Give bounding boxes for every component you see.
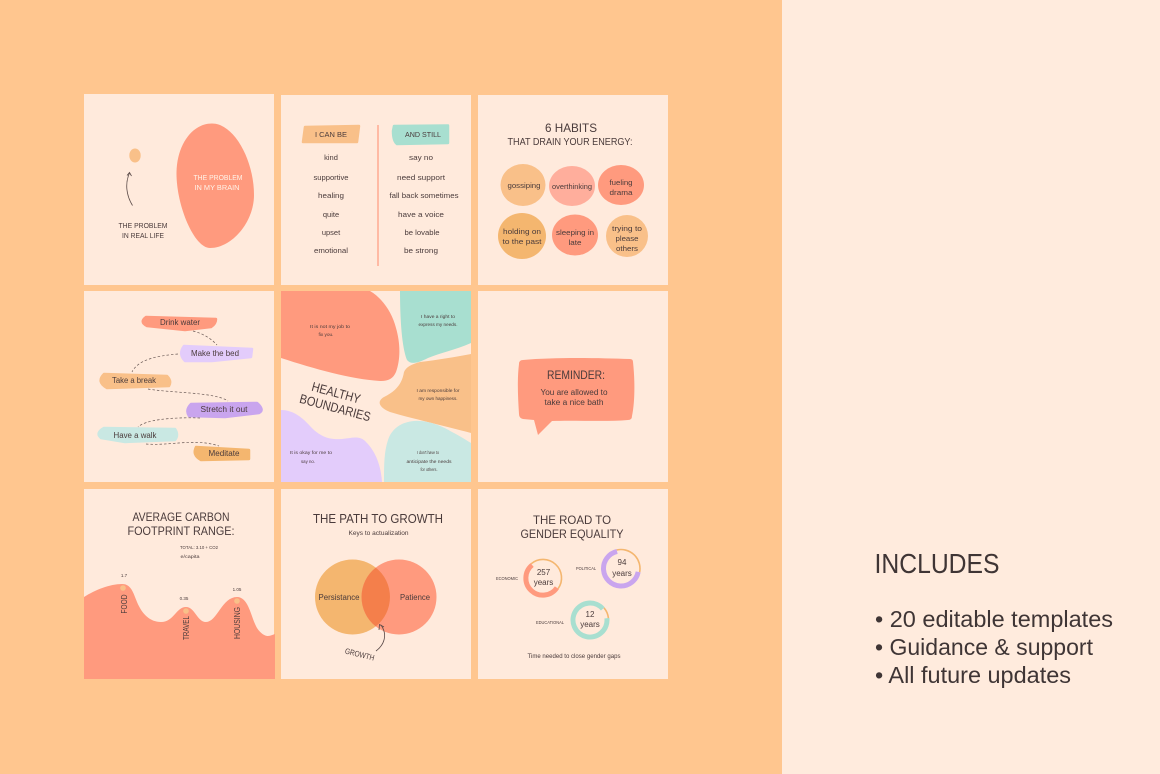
ring: political <box>576 550 640 586</box>
bubble: overthinking: overthinking <box>552 182 592 191</box>
bubble: sleeping in late: late <box>568 238 582 247</box>
blob: not my job <box>281 291 399 381</box>
text: reminder message: You are allowed to <box>540 388 608 397</box>
data labels and markers: TRAVEL <box>182 616 191 640</box>
bubble: trying to please others: please <box>616 234 638 243</box>
title: carbon footprint: AVERAGE CARBON <box>132 510 230 524</box>
list: included items <box>875 606 1113 688</box>
step: meditate: Meditate <box>208 449 240 458</box>
blob: responsible for happiness: my own happiness. <box>418 396 458 401</box>
blob: problem in my brain: THE PROBLEM <box>194 173 242 182</box>
title: path to growth: Keys to actualization <box>348 531 408 537</box>
blob: right to express: I have a right to <box>421 314 456 319</box>
list: i can be: emotional <box>314 246 348 255</box>
ring: educational: 12 <box>586 610 595 619</box>
list: and still: need support <box>397 173 446 182</box>
list: i can be <box>314 153 348 255</box>
blob: okay to say no <box>281 410 382 482</box>
blob: responsible for happiness: I am responsible for <box>416 388 460 393</box>
title: gender equality: GENDER EQUALITY <box>520 527 624 541</box>
blob: not my job: fix you. <box>318 332 334 337</box>
title: six habits <box>508 121 632 148</box>
list: and still: fall back sometimes <box>390 191 459 200</box>
bubble: sleeping in late <box>552 214 598 256</box>
title: healthy boundaries: HEALTHY <box>310 379 363 406</box>
step: stretch it out: Stretch it out <box>200 405 248 414</box>
panel: right sidebar <box>782 0 1160 774</box>
list: included items: • All future updates <box>875 662 1071 688</box>
blob: not my job: It is not my job to <box>310 324 351 329</box>
title: path to growth <box>313 511 443 537</box>
list: and still: be strong <box>404 246 438 255</box>
text: problem in real life: THE PROBLEM <box>118 221 168 230</box>
ring: educational: EDUCATIONAL <box>536 620 564 625</box>
list: and still: have a voice <box>398 210 444 219</box>
step: take a break <box>101 374 170 388</box>
bubble: trying to please others: trying to <box>612 224 642 233</box>
panel: i can be and still <box>281 95 471 285</box>
bubble: sleeping in late: sleeping in <box>556 228 594 237</box>
blob: right to express: express my needs. <box>418 322 458 327</box>
text: problem in real life <box>118 221 168 240</box>
text: total: TOTAL: 3.10 + CO2 <box>180 545 218 550</box>
list: i can be: supportive <box>314 173 348 182</box>
step: have a walk: Have a walk <box>114 431 157 440</box>
bubble: fueling drama: fueling <box>610 178 632 187</box>
ring: economic: ECONOMIC <box>496 576 519 581</box>
step: have a walk <box>99 428 177 442</box>
list: included items: • 20 editable templates <box>875 606 1113 632</box>
tag: and still <box>393 126 448 144</box>
list: i can be: quite <box>323 210 339 219</box>
title: gender equality: THE ROAD TO <box>533 513 611 527</box>
title: six habits: 6 HABITS <box>545 121 597 135</box>
ring: political: POLITICAL <box>576 566 596 571</box>
ring: educational <box>536 603 608 637</box>
data labels and markers <box>120 573 242 640</box>
blob: okay to say no: It is okay for me to <box>290 450 333 455</box>
panel: path to growth <box>281 489 471 679</box>
icon: small problem dot <box>129 148 141 162</box>
text: reminder message <box>540 368 608 407</box>
data labels and markers: 0.35 <box>180 596 189 601</box>
bubble: gossiping <box>500 164 546 206</box>
step: make the bed: Make the bed <box>191 349 239 358</box>
panel: the problem <box>84 94 274 285</box>
tag: i can be <box>303 126 359 142</box>
title: path to growth: THE PATH TO GROWTH <box>313 511 443 526</box>
blob: anticipate needs: for others. <box>420 467 438 472</box>
bubble: holding on to the past <box>498 213 546 259</box>
data labels and markers: FOOD <box>120 594 129 614</box>
bubble: holding on to the past: holding on <box>503 227 541 236</box>
data labels and markers: 1.05 <box>233 587 242 592</box>
ring: political: 94 <box>618 558 627 567</box>
title: healthy boundaries <box>298 379 373 424</box>
blob: right to express <box>400 291 471 363</box>
blob: anticipate needs: anticipate the needs <box>406 459 452 464</box>
list: i can be: upset <box>322 228 341 237</box>
bubble: fueling drama <box>598 165 644 205</box>
ring: economic: 257 <box>537 568 551 577</box>
panel: healthy boundaries <box>281 291 471 482</box>
panel: routine flow <box>84 291 274 482</box>
data labels and markers: HOUSING <box>233 607 242 639</box>
bubble: trying to please others <box>606 215 648 257</box>
panel: gender equality <box>478 489 668 679</box>
tag: and still: AND STILL <box>405 130 441 139</box>
bubble: trying to please others: others <box>616 244 638 253</box>
title: healthy boundaries: BOUNDARIES <box>298 391 373 424</box>
blob: problem in my brain <box>176 124 254 248</box>
text: total: e/capita <box>180 554 200 559</box>
list: i can be: healing <box>318 191 344 200</box>
blob: responsible for happiness <box>380 354 471 433</box>
divider line <box>377 125 379 266</box>
list: and still: be lovable <box>404 228 440 237</box>
bubble: overthinking <box>549 166 595 206</box>
list: and still: say no <box>409 153 433 162</box>
ring: political: years <box>612 569 632 578</box>
title: carbon footprint <box>128 510 234 538</box>
arrow and label: growth: GROWTH <box>344 647 375 663</box>
step: meditate <box>195 447 249 460</box>
title: gender equality <box>520 513 624 541</box>
ring: economic <box>496 559 562 595</box>
dashed connectors <box>132 331 228 446</box>
text: total <box>180 545 218 559</box>
panel: six habits <box>478 95 668 285</box>
panel: carbon footprint <box>84 489 275 679</box>
heading: includes: INCLUDES <box>874 548 1000 579</box>
text: problem in real life: IN REAL LIFE <box>122 231 164 240</box>
list: i can be: kind <box>324 153 338 162</box>
step: make the bed <box>181 346 252 361</box>
bubble: fueling drama: drama <box>610 188 633 197</box>
step: drink water: Drink water <box>160 318 200 327</box>
text: reminder message: take a nice bath <box>544 398 604 407</box>
speech bubble <box>518 358 634 435</box>
venn diagram: Patience <box>400 593 431 602</box>
text: reminder message: REMINDER: <box>547 368 605 382</box>
ring: educational: years <box>580 620 600 629</box>
title: carbon footprint: FOOTPRINT RANGE: <box>128 524 234 538</box>
data labels and markers: 1.7 <box>121 573 128 578</box>
blob: anticipate needs: I don't have to <box>417 450 439 455</box>
ring: economic: years <box>534 578 553 587</box>
blob: problem in my brain: IN MY BRAIN <box>194 183 240 192</box>
panel: reminder <box>478 291 668 482</box>
blob: anticipate needs <box>384 421 471 482</box>
step: stretch it out <box>187 403 262 417</box>
blob: okay to say no: say no. <box>301 459 315 464</box>
area chart <box>84 584 275 679</box>
arrow: upward curve <box>127 172 132 206</box>
step: drink water <box>143 317 216 330</box>
caption: time needed: Time needed to close gender gaps <box>528 654 620 660</box>
bubble: holding on to the past: to the past <box>502 237 543 246</box>
step: take a break: Take a break <box>112 376 157 385</box>
venn diagram: Persistance <box>318 593 360 602</box>
bubble: gossiping: gossiping <box>508 181 540 190</box>
venn diagram <box>315 560 436 634</box>
list: and still <box>390 153 459 255</box>
list: included items: • Guidance & support <box>875 634 1094 660</box>
tag: i can be: I CAN BE <box>315 130 347 139</box>
title: six habits: THAT DRAIN YOUR ENERGY: <box>508 136 632 148</box>
arrow and label: growth <box>344 624 385 663</box>
